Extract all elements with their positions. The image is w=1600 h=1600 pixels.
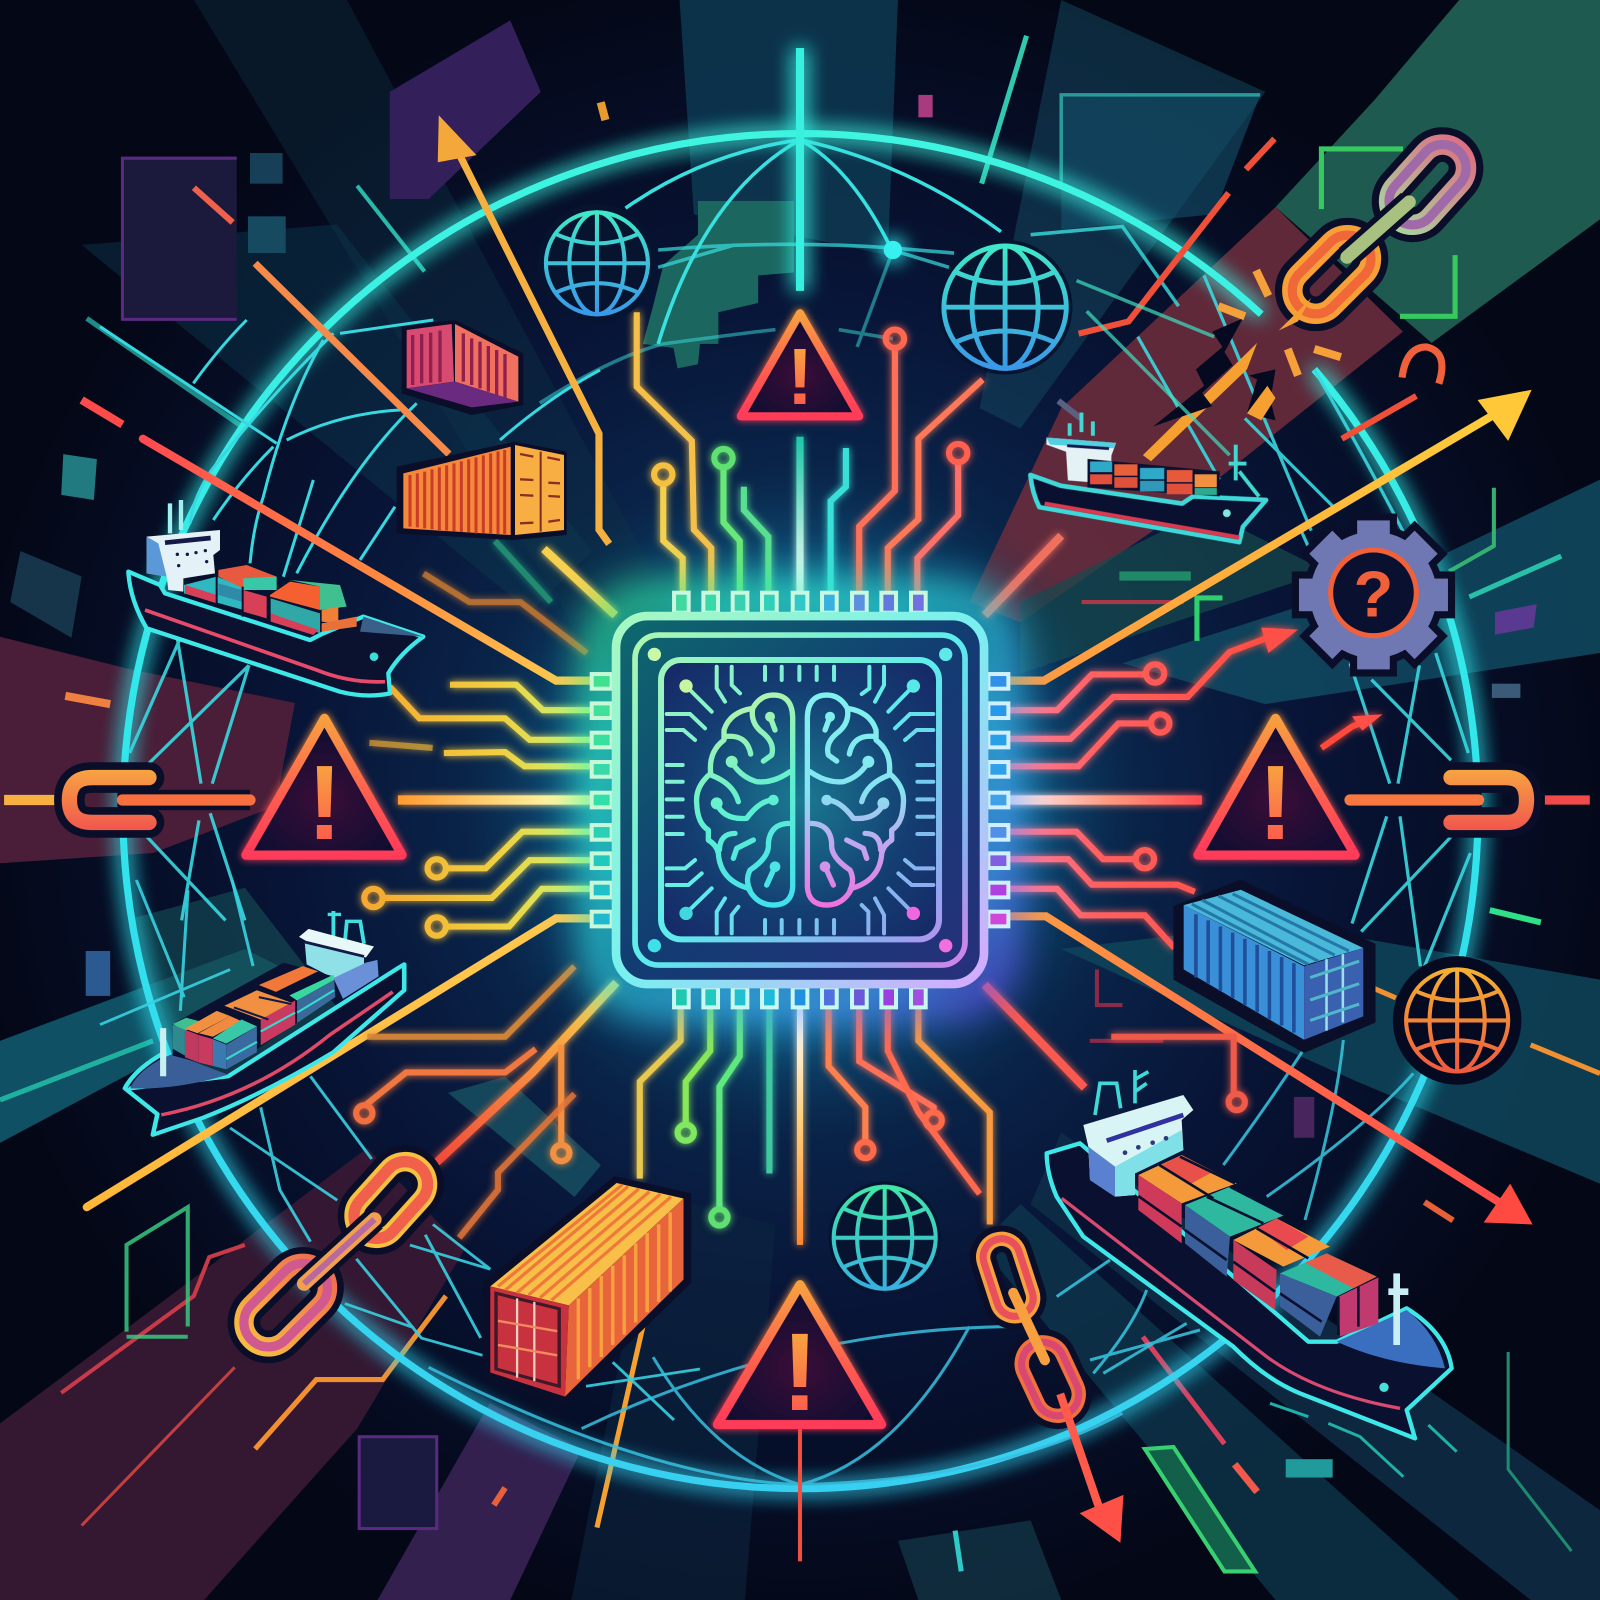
icon: warning triangle top: ! [787,332,813,421]
arrow: long lower left [87,918,590,1207]
left dash [82,400,122,424]
center right beam [1008,796,1202,804]
arrow: yellow to upper right [1010,390,1532,681]
icon: gear with question mark: ? [1354,557,1393,630]
circuit traces: top [637,312,983,594]
icon: warning triangle right: ! [1258,744,1293,862]
arrow: orange long upper left [143,439,590,681]
container big orange [483,1176,691,1405]
arrow: yellow to top left [438,115,609,544]
chip corner diagonals [437,536,1085,1162]
cargo ship upper right [1030,413,1266,542]
crack and sparks [1077,270,1442,455]
bracket lower left [127,1207,188,1337]
brain left hemisphere [697,695,793,905]
globe wireframe sphere [100,134,1478,1489]
cargo ship lower right [1047,1070,1457,1477]
globe mesh left and right [130,276,1470,966]
chip [592,593,1008,1007]
chip pins right [988,674,1008,926]
chip core frame [661,660,939,939]
icon: globe upper right [938,240,1072,374]
upper left scene [128,320,567,695]
icon: warning triangle top [741,313,859,421]
circuit traces: left [364,685,592,936]
chip screws [648,648,952,952]
icon: warning triangle left: ! [307,744,342,862]
chain bottom with arrow [978,1234,1123,1543]
icon: globe bottom [829,1182,941,1294]
bottom vertical line [798,1429,802,1561]
chip inner frame [635,635,965,965]
container red [402,320,523,415]
lower left mesh [100,880,700,1420]
chain top right [1283,135,1476,324]
globe outer ring [123,134,1478,1489]
center top beam [796,437,804,594]
top left orange line [255,263,449,454]
chip inner circuit stubs [667,667,933,933]
arrow: upper right broken orange [1143,343,1257,461]
lower right mesh [1057,1040,1413,1373]
lower left scene [125,911,691,1405]
central glow [408,408,1192,1192]
globe meridians and parallels top [540,140,1179,403]
icon: warning triangle left [246,718,402,862]
chip pins top [674,593,926,613]
cargo ship upper left [128,500,423,695]
upper left mesh [100,320,600,577]
circuit traces: bottom [356,541,1245,1238]
arrow: red to lower right [1010,916,1533,1224]
chain bottom left scene [61,1152,437,1393]
top vertical beacon with node [800,48,902,291]
chip halo [600,600,1000,1000]
circuit traces: right [1008,628,1383,948]
chip pins bottom [674,987,926,1007]
icon: gear with question mark [1299,520,1448,669]
chip package [616,616,984,984]
icon: globe right orange [1393,956,1521,1085]
chip corner dots [679,679,920,920]
icon: warning triangle bottom [717,1285,882,1434]
icon: warning triangle bottom: ! [782,1311,818,1434]
cargo ship lower left [125,911,404,1135]
horizontal chain left [4,778,250,822]
brain right hemisphere [807,695,903,905]
icon: globe upper left [538,204,656,322]
center left beam [398,796,592,804]
icon: warning triangle right [1198,718,1355,862]
globe bottom arcs [429,1327,1122,1485]
container blue [1173,880,1376,1053]
container orange [397,442,567,540]
horizontal chain right [1350,778,1590,822]
center bottom beam [797,1008,803,1245]
upper right red trace [1079,139,1274,334]
chip pins left [592,674,612,926]
